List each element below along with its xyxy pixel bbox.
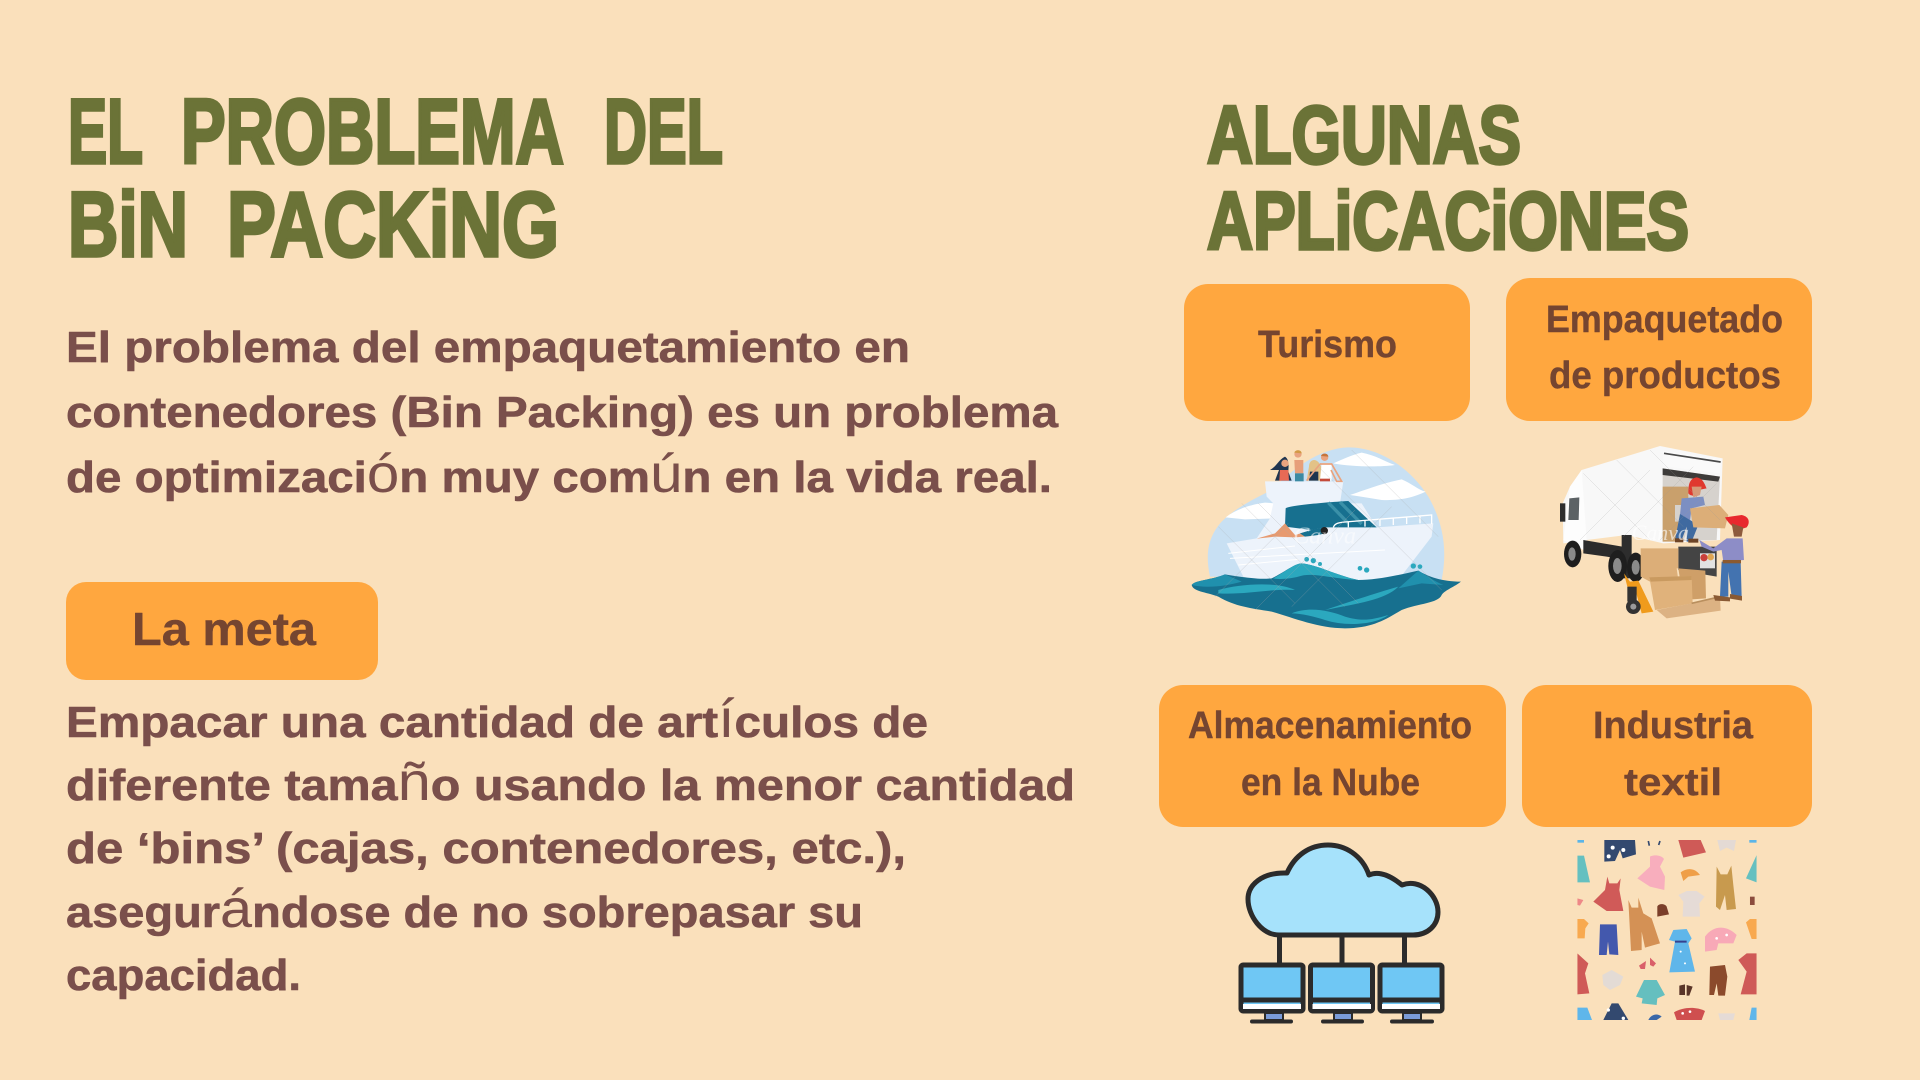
heading: Algunas aplicaciones [1207,90,1689,267]
sea [1192,563,1461,628]
card: Industria textil: Industria [1593,705,1754,747]
text block: goal description: capacidad. [66,951,301,1000]
title: El problema del Bin Packing: PACKiNG [227,174,559,276]
card: Almacenamiento en la Nube [1159,685,1506,827]
illustration: workers unloading boxes from a truck [1560,446,1749,618]
card: Turismo [1184,284,1470,421]
card: Almacenamiento en la Nube: en la Nube [1241,762,1420,804]
text block: goal description: diferente tama ño usando la menor cantidad [66,752,1075,812]
icon: cloud connected to three computers [1241,845,1442,1022]
text block: goal description [66,689,1075,1000]
card: Empaquetado de productos: Empaquetado [1546,299,1783,341]
title: El problema del Bin Packing: BiN [68,174,188,276]
card: Industria textil [1522,685,1812,827]
card: Turismo: Turismo [1258,324,1397,366]
text block: goal description: de ‘bins’ (cajas, contenedores, etc.), [66,824,906,873]
illustration: workers unloading boxes from a truck: Canva [1632,520,1689,545]
text block: goal description: asegurándose de no sobrepasar su [66,879,863,939]
people [1270,457,1292,481]
heading: Algunas aplicaciones: ALGUNAS [1207,90,1521,181]
worker in truck [1680,497,1705,520]
text block: introduction: contenedores (Bin Packing) es un problema [66,388,1059,437]
text block: introduction [66,323,1059,504]
card: Industria textil: textil [1624,762,1722,804]
card: Empaquetado de productos: de productos [1549,355,1781,397]
boxes [1641,548,1678,582]
illustration: yacht with tourists on waves: Canva [1293,523,1356,549]
title: El problema del Bin Packing: PROBLEMA [181,81,564,183]
text block: introduction: de optimizaci ón muy com ún en la vida real. [66,444,1052,504]
text block: introduction: El problema del empaquetamiento en [66,323,910,372]
title: El problema del Bin Packing [68,81,723,276]
title: El problema del Bin Packing: DEL [604,81,723,183]
text block: goal description: Empacar una cantidad de art ículos de [66,689,928,749]
heading: Algunas aplicaciones: APLiCACiONES [1207,176,1689,267]
label box: La meta: La meta [132,603,316,655]
title: El problema del Bin Packing: EL [68,81,143,183]
illustration: clothing pattern [1577,840,1757,1020]
illustration: yacht with tourists on waves [1192,447,1461,628]
worker outside [1725,515,1749,530]
card: Empaquetado de productos [1506,278,1812,421]
card: Almacenamiento en la Nube: Almacenamiento [1188,705,1472,747]
label box: La meta [66,582,378,680]
pallet jack [1624,573,1653,613]
